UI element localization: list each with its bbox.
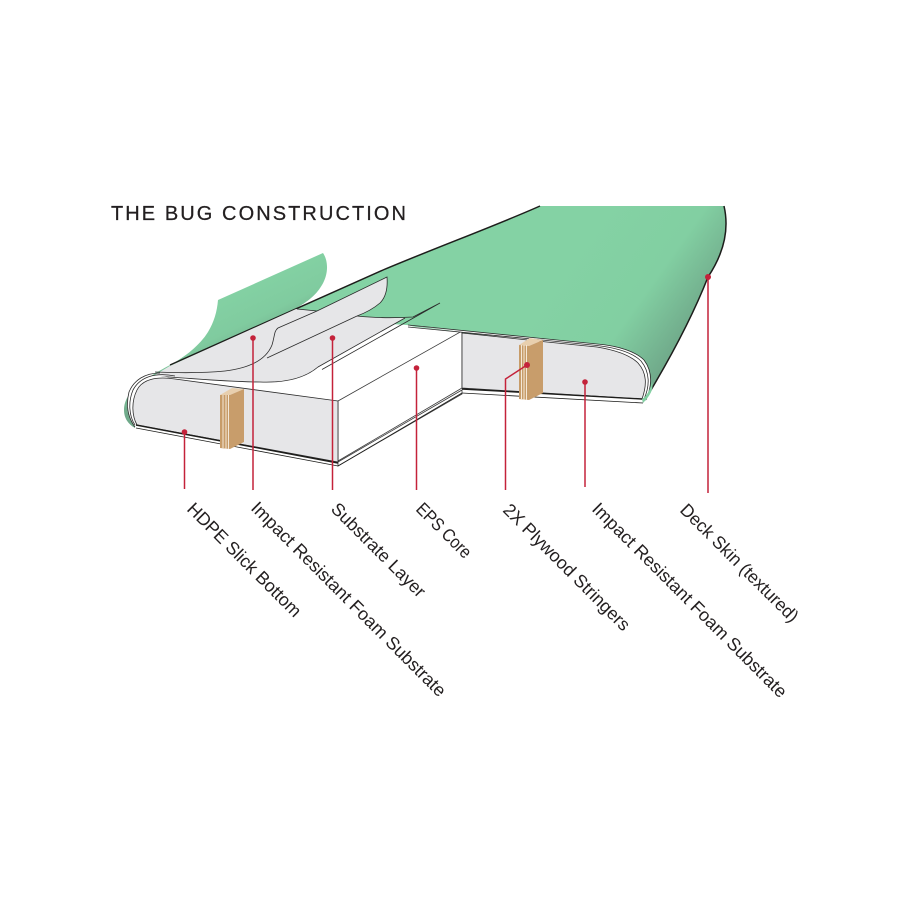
right plywood stringer xyxy=(519,338,543,400)
green bottom right tip xyxy=(642,382,653,403)
left foam substrate block xyxy=(133,378,338,462)
leader: HDPE slick bottom xyxy=(182,429,187,489)
leader: plywood stringers xyxy=(506,362,530,490)
label: EPS core: EPS Core xyxy=(412,499,476,562)
label: deck skin: Deck Skin (textured) xyxy=(676,500,803,626)
right rim lines xyxy=(408,325,651,400)
sheet edge lines xyxy=(153,277,440,382)
left rim lines xyxy=(127,373,175,427)
white band and rim behind left foam xyxy=(127,376,170,427)
leader lines and dots xyxy=(182,274,711,493)
EPS core xyxy=(240,326,462,466)
leader: foam substrate left xyxy=(250,335,256,490)
label: foam substrate left: Impact Resistant Foam Substrate xyxy=(247,498,450,701)
rim band behind right foam xyxy=(408,325,651,400)
deck skin: main green surface xyxy=(170,206,726,403)
deck skin: peeled flap xyxy=(124,253,327,428)
leader: substrate layer xyxy=(330,335,335,490)
label: HDPE slick bottom: HDPE Slick Bottom xyxy=(183,499,306,621)
label: foam substrate right: Impact Resistant Foam Substrate xyxy=(588,499,791,702)
left plywood stringer xyxy=(220,388,244,449)
HDPE slick bottom, right xyxy=(462,389,643,403)
leader: foam substrate right xyxy=(582,379,588,487)
leader: EPS core xyxy=(414,365,419,490)
leader: deck skin xyxy=(705,274,711,493)
label: 2X plywood stringers: 2X Plywood Stringers xyxy=(499,500,634,635)
title: THE BUG CONSTRUCTION xyxy=(111,203,406,225)
HDPE slick bottom, left xyxy=(136,393,462,466)
label: substrate layer: Substrate Layer xyxy=(327,499,430,601)
deck edge outline xyxy=(170,206,726,400)
right foam substrate block xyxy=(462,333,645,399)
board illustration xyxy=(124,206,726,466)
labels xyxy=(183,498,803,702)
substrate sheet peel xyxy=(153,277,405,382)
